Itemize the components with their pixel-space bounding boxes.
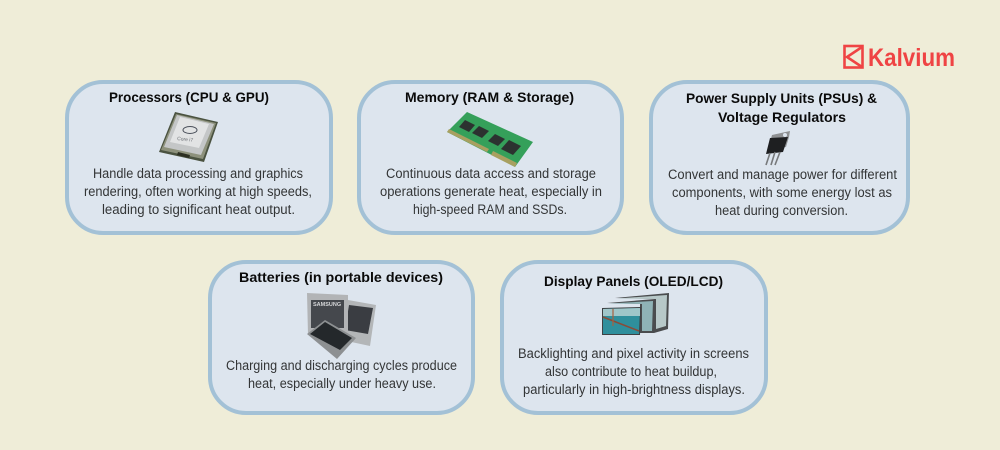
logo: Kalvium bbox=[844, 44, 955, 72]
description: particularly in high-brightness displays. bbox=[523, 382, 745, 397]
description: operations generate heat, especially in bbox=[380, 184, 602, 199]
heading: Display Panels (OLED/LCD) bbox=[544, 273, 723, 289]
card background bbox=[67, 82, 331, 233]
panel: processors bbox=[67, 82, 331, 233]
icon: CPU chip: Core i7 bbox=[177, 136, 194, 144]
description: also contribute to heat buildup, bbox=[545, 364, 717, 379]
icon: batteries bbox=[307, 293, 376, 359]
panel: display panels bbox=[502, 262, 766, 413]
panel: batteries bbox=[210, 262, 473, 413]
description: leading to significant heat output. bbox=[102, 202, 295, 217]
description: heat during conversion. bbox=[715, 203, 848, 218]
icon: display screens bbox=[602, 293, 669, 335]
heading bbox=[686, 90, 877, 125]
description bbox=[380, 166, 602, 217]
heading: Voltage Regulators bbox=[718, 109, 846, 125]
icon: CPU chip bbox=[159, 112, 218, 162]
description: Handle data processing and graphics bbox=[93, 166, 303, 181]
description bbox=[84, 166, 312, 217]
description: rendering, often working at high speeds, bbox=[84, 184, 312, 199]
heading: Processors (CPU & GPU) bbox=[109, 89, 269, 105]
icon: RAM module bbox=[447, 112, 533, 167]
heading: Batteries (in portable devices) bbox=[239, 269, 443, 285]
card background bbox=[210, 262, 473, 413]
card background bbox=[359, 82, 622, 233]
icon: batteries: SAMSUNG bbox=[313, 302, 341, 308]
panel: memory bbox=[359, 82, 622, 233]
heading: Power Supply Units (PSUs) & bbox=[686, 90, 877, 106]
description: Convert and manage power for different bbox=[668, 167, 897, 182]
description: Charging and discharging cycles produce bbox=[226, 358, 457, 373]
panel: power supply units bbox=[651, 82, 908, 233]
description: Backlighting and pixel activity in screens bbox=[518, 346, 749, 361]
card background bbox=[502, 262, 766, 413]
description bbox=[668, 167, 897, 218]
logo wordmark: Kalvium bbox=[868, 44, 955, 72]
card background bbox=[651, 82, 908, 233]
description: components, with some energy lost as bbox=[672, 185, 892, 200]
description bbox=[226, 358, 457, 391]
description: Continuous data access and storage bbox=[386, 166, 596, 181]
description: high-speed RAM and SSDs. bbox=[413, 202, 567, 217]
description: heat, especially under heavy use. bbox=[248, 376, 436, 391]
heading: Memory (RAM & Storage) bbox=[405, 89, 574, 105]
description bbox=[518, 346, 749, 397]
icon: Kalvium mark bbox=[844, 46, 862, 68]
icon: voltage regulator bbox=[766, 131, 790, 165]
